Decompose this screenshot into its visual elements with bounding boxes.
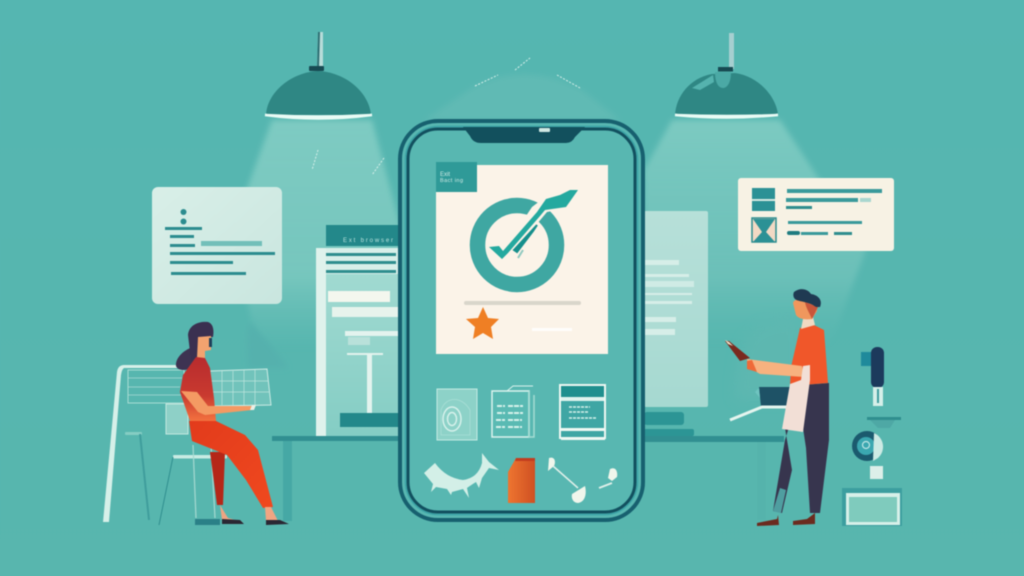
app icon: list thumbnail [492, 386, 534, 437]
orange shirt [790, 325, 828, 386]
chair and glass screen behind woman [103, 365, 227, 525]
held book [725, 341, 750, 361]
man standing [725, 289, 829, 526]
feet [220, 505, 243, 522]
equipment: right wall [842, 347, 902, 526]
light cone: left lamp [232, 120, 404, 350]
hair [188, 322, 213, 360]
shoes [757, 515, 779, 526]
app icon: browser thumbnail [560, 385, 606, 440]
panel: back screen right [644, 211, 708, 436]
panel: right wall note [738, 178, 894, 251]
light cone: right lamp [644, 120, 866, 345]
app icon: ring thumbnail [437, 389, 477, 440]
panel: left wall note [152, 187, 282, 304]
app icon: orange block [508, 458, 535, 503]
red shirt [180, 357, 216, 421]
hair bun [176, 346, 198, 370]
card tag [436, 162, 477, 192]
app card: Exit [440, 172, 450, 178]
apron [782, 365, 810, 432]
app icon: bone shapes [548, 458, 617, 503]
back leg [210, 452, 225, 505]
app card [436, 162, 608, 354]
lamp: right [675, 33, 778, 118]
neck [801, 317, 815, 329]
woman seated [176, 322, 289, 525]
app icon: curved white shape [424, 453, 499, 498]
rating bar [464, 301, 581, 305]
hair [793, 289, 821, 307]
panel: back screen left: Ext browser [343, 238, 393, 244]
icon: star [466, 307, 499, 339]
desk [272, 436, 784, 521]
monitor behind man [730, 387, 800, 420]
soft shape behind woman [247, 322, 288, 368]
lamp: left [265, 32, 372, 118]
tablet: grid in front of woman [210, 369, 271, 406]
arm [747, 359, 804, 377]
device box [842, 488, 902, 526]
head [793, 298, 817, 319]
panel: back screen left [316, 225, 402, 437]
check ring logo [478, 206, 556, 284]
gauge dial [852, 431, 882, 461]
soft shape behind man [735, 320, 800, 400]
phone [400, 121, 643, 520]
orange trousers [189, 421, 273, 508]
sparkles: top centre [312, 58, 580, 175]
glow: top centre dome [425, 74, 620, 120]
notch [463, 127, 585, 143]
dark trousers [773, 383, 829, 513]
arm [181, 391, 252, 415]
phone body [400, 121, 643, 520]
app card: Bact ing [440, 178, 463, 184]
face and neck [197, 336, 211, 358]
